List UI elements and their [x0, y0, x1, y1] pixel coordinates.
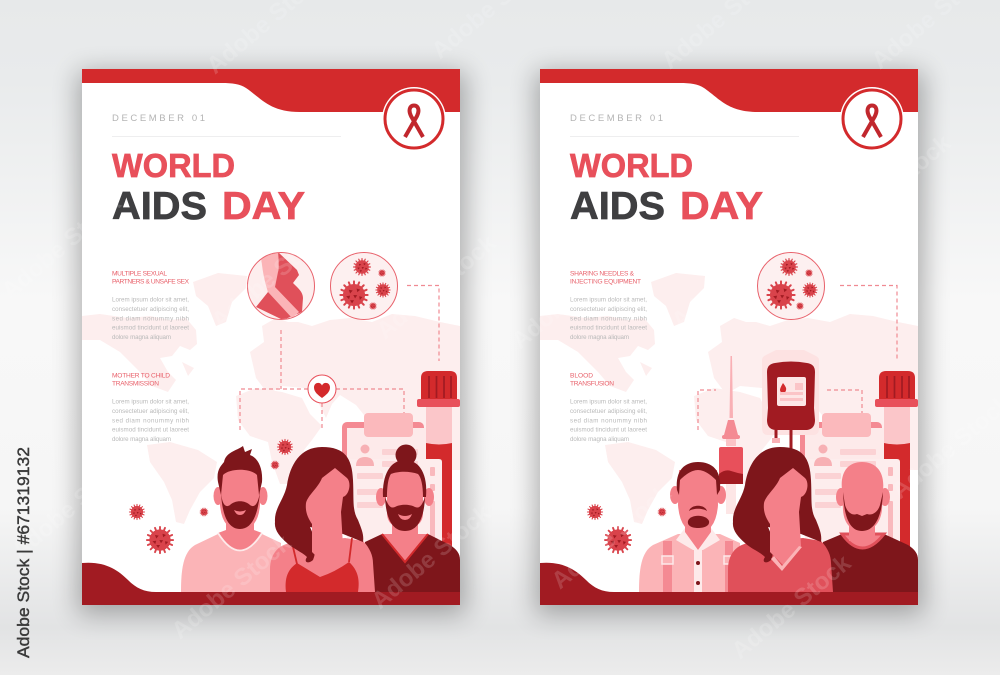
title: WORLD	[112, 147, 235, 184]
stock watermarks: Adobe Stock	[547, 479, 677, 595]
person: bald bearded man	[823, 462, 918, 592]
title: DAY	[680, 185, 763, 228]
text block: blood transfusion	[570, 372, 648, 443]
stock watermarks: Adobe Stock	[0, 189, 127, 305]
text block: sharing needles: consectetuer adipiscing elit,	[570, 306, 647, 313]
text block: blood transfusion: BLOOD	[570, 372, 593, 380]
stock watermarks: Adobe Stock	[667, 219, 797, 335]
stock id caption: Adobe Stock | #671319132	[14, 447, 33, 658]
title	[112, 153, 305, 220]
person: man with bun	[365, 444, 460, 592]
text block: multiple partners: euismod tincidunt ut laoreet	[112, 325, 189, 332]
person: man with suspenders and goatee	[639, 462, 740, 592]
icon: virus circle	[758, 252, 824, 320]
text block: mother to child: dolore magna aliquam	[112, 436, 171, 443]
icon: virus circle	[330, 252, 398, 320]
stock watermarks: Adobe Stock	[207, 219, 337, 335]
stock watermarks: Adobe Stock	[507, 239, 637, 355]
icon: blood bag	[762, 350, 819, 450]
text block: sharing needles	[570, 270, 648, 341]
text block: multiple partners	[112, 270, 190, 341]
title: AIDS	[570, 185, 665, 228]
text block: blood transfusion: sed diam nonummy nibh	[570, 417, 648, 424]
lab: clipboard and blood tube	[800, 371, 918, 548]
ribbon badge	[840, 87, 904, 151]
text block: sharing needles: INJECTING EQUIPMENT	[570, 279, 641, 286]
text block: sharing needles: Lorem ipsum dolor sit amet,	[570, 297, 647, 304]
title: DAY	[222, 185, 305, 228]
text block: mother to child	[112, 372, 190, 443]
text block: multiple partners: Lorem ipsum dolor sit amet,	[112, 297, 189, 304]
title: WORLD	[570, 147, 693, 184]
person: woman in red top	[270, 447, 375, 592]
poster: left, mother to child	[82, 69, 460, 605]
text block: blood transfusion: consectetuer adipiscing elit,	[570, 408, 647, 415]
text block: mother to child: TRANSMISSION	[112, 381, 159, 388]
floating viruses	[129, 439, 293, 553]
icon: pregnant belly circle	[248, 252, 314, 320]
header band	[82, 69, 460, 112]
text block: sharing needles: SHARING NEEDLES &	[570, 270, 635, 278]
dashed connectors	[698, 286, 897, 430]
text block: mother to child: sed diam nonummy nibh	[112, 417, 190, 424]
icon: syringe	[719, 356, 743, 514]
text block: mother to child: MOTHER TO CHILD	[112, 372, 170, 380]
icon: heart	[308, 375, 336, 403]
text block: blood transfusion: euismod tincidunt ut laoreet	[570, 427, 647, 434]
poster: right, needles and transfusion	[540, 69, 918, 605]
text block: multiple partners: sed diam nonummy nibh	[112, 315, 190, 322]
stock watermarks: Adobe Stock	[372, 229, 502, 345]
title	[570, 153, 763, 220]
bottom wave	[540, 563, 918, 605]
text block: multiple partners: PARTNERS & UNSAFE SEX	[112, 279, 190, 286]
header band	[540, 69, 918, 112]
stock watermarks: Adobe Stock	[7, 449, 137, 565]
stock watermarks: Adobe Stock	[167, 529, 297, 645]
world map	[540, 273, 918, 524]
text block: multiple partners: dolore magna aliquam	[112, 334, 171, 341]
text block: blood transfusion: Lorem ipsum dolor sit amet,	[570, 399, 647, 406]
bottom wave	[82, 563, 460, 605]
text block: multiple partners: consectetuer adipiscing elit,	[112, 306, 189, 313]
date: DECEMBER 01	[112, 113, 205, 124]
text block: mother to child: consectetuer adipiscing elit,	[112, 408, 189, 415]
text block: sharing needles: sed diam nonummy nibh	[570, 315, 648, 322]
stock watermarks: Adobe Stock	[727, 549, 857, 665]
dashed connectors	[240, 286, 439, 430]
text block: mother to child: Lorem ipsum dolor sit amet,	[112, 399, 189, 406]
text block: sharing needles: euismod tincidunt ut laoreet	[570, 325, 647, 332]
world map	[82, 273, 460, 524]
text block: blood transfusion: dolore magna aliquam	[570, 436, 629, 443]
floating viruses	[587, 504, 666, 553]
text block: multiple partners: MULTIPLE SEXUAL	[112, 270, 167, 278]
lab: clipboard and blood tube	[342, 371, 460, 548]
stock watermarks: Adobe Stock	[827, 129, 957, 245]
text block: sharing needles: dolore magna aliquam	[570, 334, 629, 341]
person: woman in red top	[728, 447, 833, 592]
stock watermarks: Adobe Stock	[367, 499, 497, 615]
text block: blood transfusion: TRANSFUSION	[570, 381, 614, 388]
ribbon badge	[382, 87, 446, 151]
person: bearded man in pale shirt	[181, 446, 281, 592]
date: DECEMBER 01	[570, 113, 663, 124]
title: AIDS	[112, 185, 207, 228]
text block: mother to child: euismod tincidunt ut laoreet	[112, 427, 189, 434]
poster shadows	[78, 72, 924, 614]
